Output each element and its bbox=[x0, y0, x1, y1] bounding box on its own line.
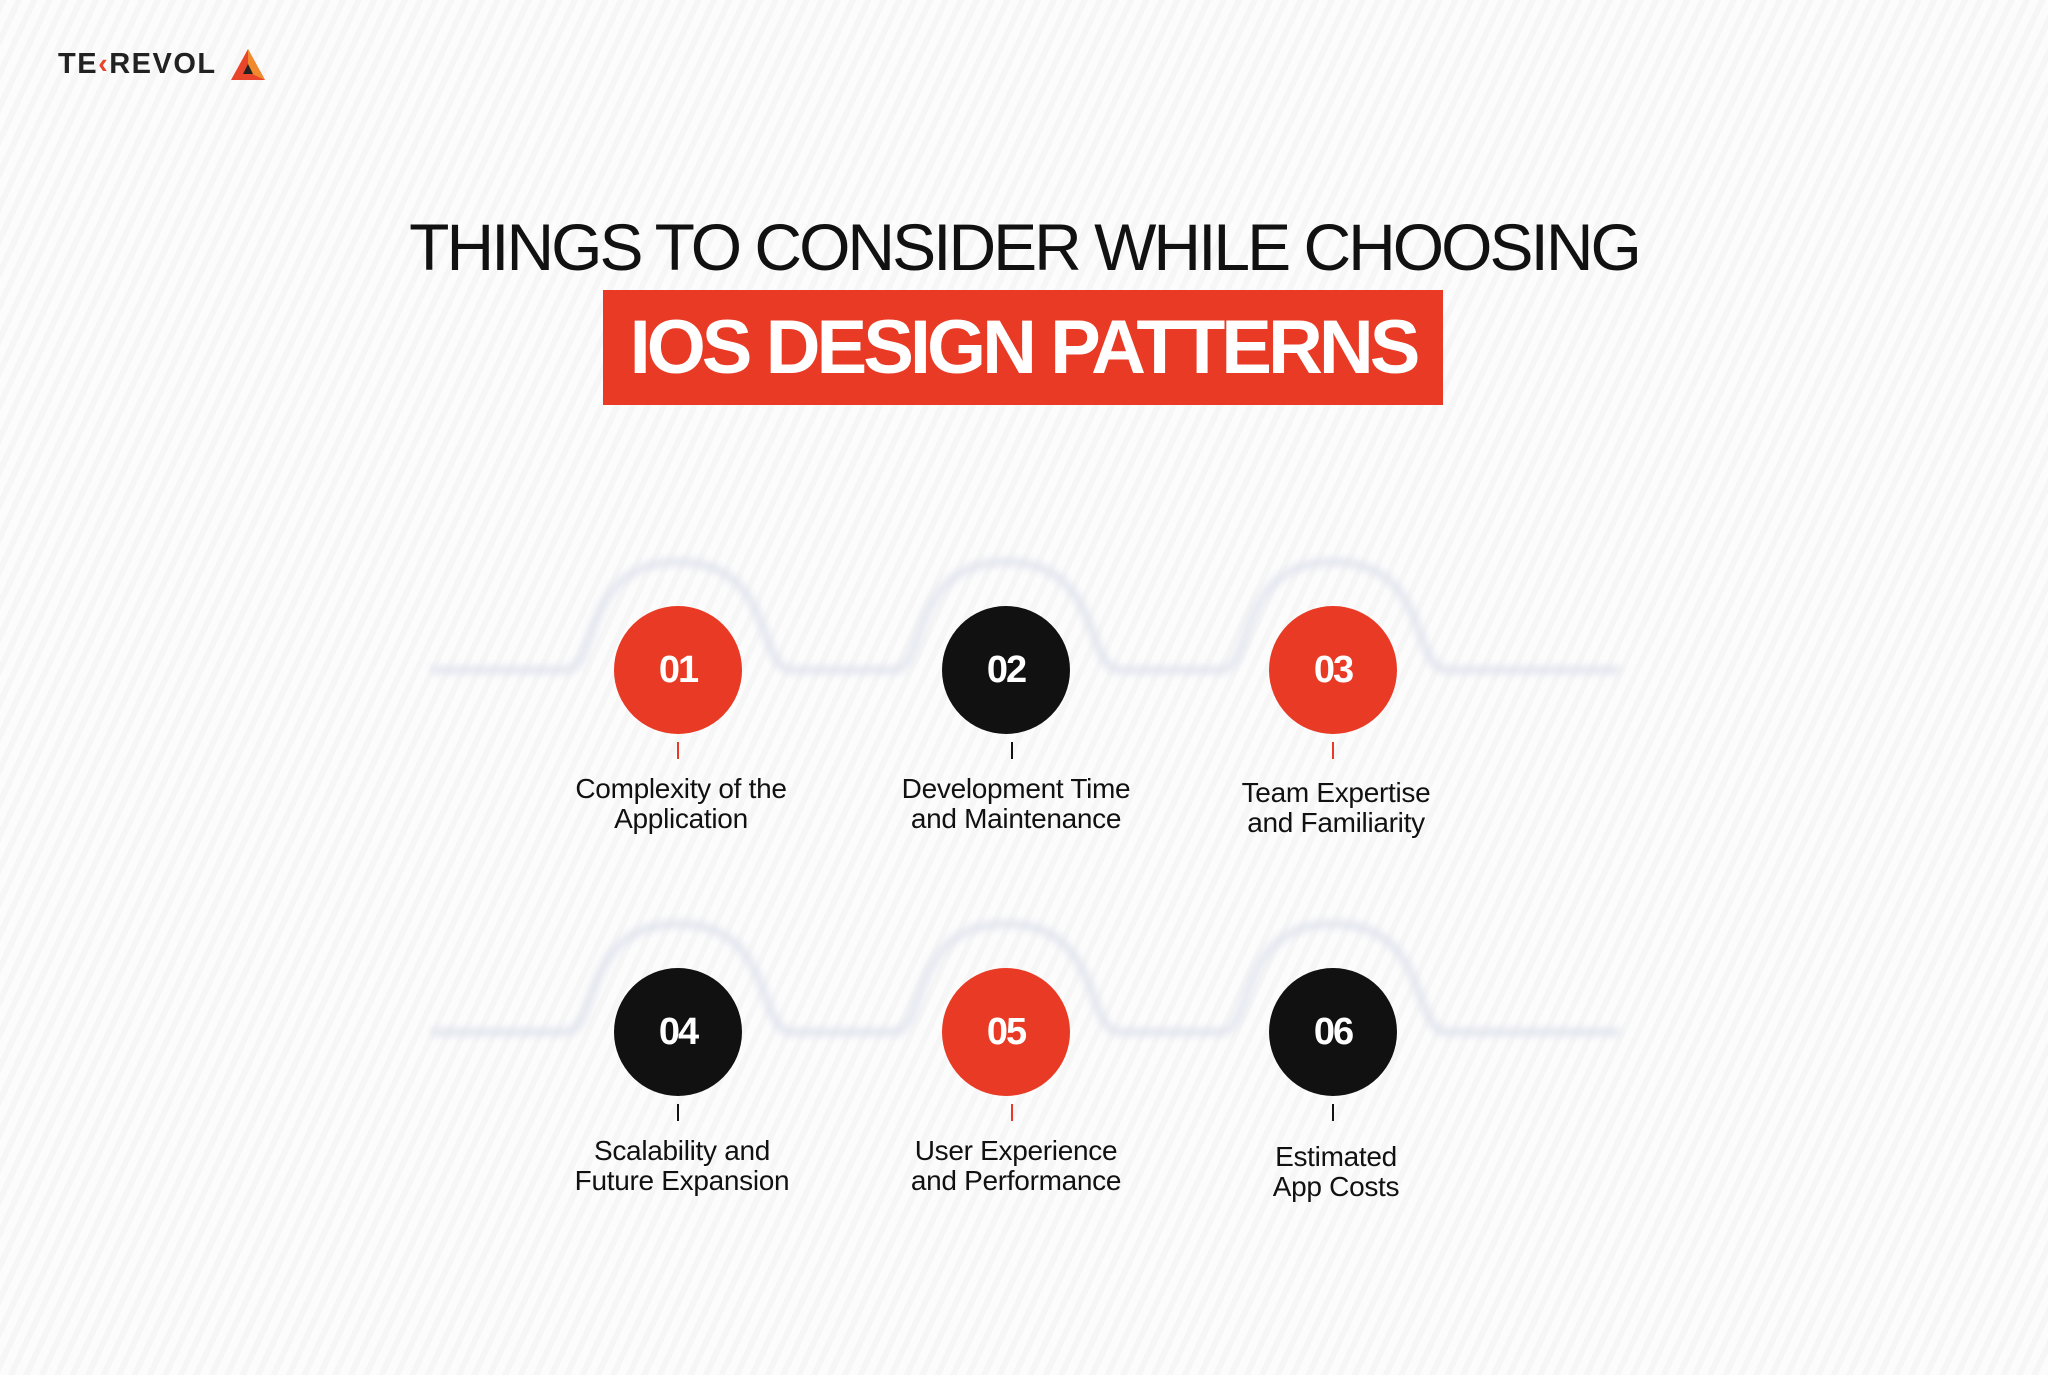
logo: TE‹REVOL bbox=[58, 48, 217, 80]
item 05: User Experience bbox=[915, 1135, 1117, 1166]
item 04: Future Expansion bbox=[575, 1165, 789, 1196]
item 03: and Familiarity bbox=[1247, 807, 1425, 838]
item 02: Development Time bbox=[902, 773, 1130, 804]
item 06: App Costs bbox=[1273, 1171, 1399, 1202]
item 02 bbox=[902, 606, 1130, 834]
item 04: Scalability and bbox=[594, 1135, 770, 1166]
item 02: 02 bbox=[987, 648, 1025, 690]
item 01 bbox=[575, 606, 787, 834]
item 06 bbox=[1269, 968, 1399, 1202]
title banner bbox=[603, 290, 1443, 405]
item 06: 06 bbox=[1314, 1010, 1352, 1052]
item 05: and Performance bbox=[911, 1165, 1121, 1196]
item 06: Estimated bbox=[1275, 1141, 1397, 1172]
item 03: Team Expertise bbox=[1242, 777, 1430, 808]
title: THINGS TO CONSIDER WHILE CHOOSING bbox=[409, 210, 1639, 284]
item 01: Complexity of the bbox=[575, 773, 787, 804]
title banner: IOS DESIGN PATTERNS bbox=[630, 305, 1416, 390]
item 03: 03 bbox=[1314, 648, 1352, 690]
item 02: and Maintenance bbox=[911, 803, 1121, 834]
item 04: 04 bbox=[659, 1010, 697, 1052]
item 05 bbox=[911, 968, 1121, 1196]
item 03 bbox=[1242, 606, 1430, 838]
item 05: 05 bbox=[987, 1010, 1025, 1052]
item 04 bbox=[575, 968, 789, 1196]
item 01: Application bbox=[614, 803, 748, 834]
item 01: 01 bbox=[659, 648, 697, 690]
